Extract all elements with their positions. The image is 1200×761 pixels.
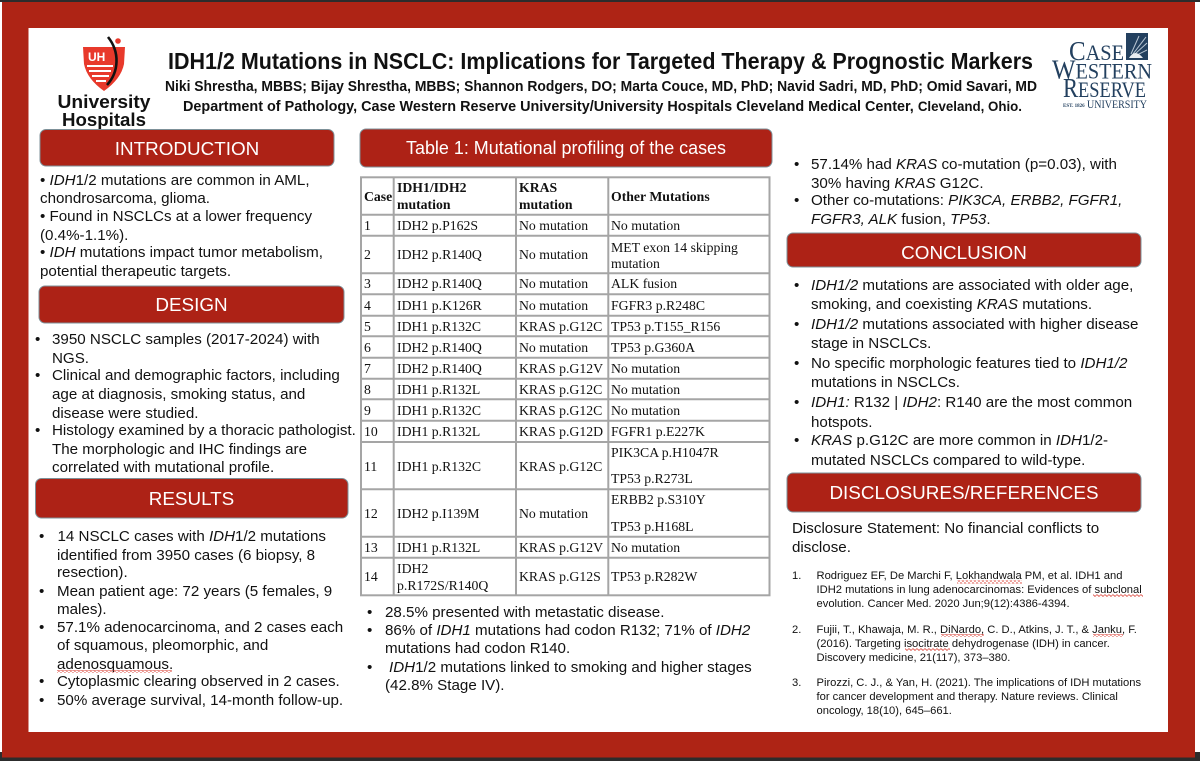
table: mutational profiling: 8 (364, 382, 371, 397)
table: mutational profiling: No mutation (611, 218, 680, 233)
text: design: • (35, 367, 40, 384)
text: results continued: • (367, 659, 372, 676)
table: mutational profiling: IDH1 p.R132C (397, 319, 481, 334)
heading: introduction (40, 130, 334, 166)
text: results: • (39, 673, 44, 690)
table: mutational profiling: mutation (397, 197, 451, 212)
table: mutational profiling: FGFR1 p.E227K (611, 424, 705, 439)
table: mutational profiling: KRAS (519, 180, 558, 195)
table: mutational profiling: ERBB2 p.S310Y (611, 492, 706, 507)
text: references: Pirozzi, C. J., & Yan, H. (2021). The implications of IDH mutations (816, 677, 1141, 689)
text: conclusion (794, 277, 1138, 469)
text: results: • (39, 528, 44, 545)
text: results: Mean patient age: 72 years (5 females, 9 (57, 583, 332, 600)
table: mutational profiling: 14 (364, 569, 378, 584)
text: results: identified from 3950 cases (6 biopsy, 8 (57, 547, 315, 564)
text: results: Cytoplasmic clearing observed in 2 cases. (57, 673, 340, 690)
text: references: evolution. Cancer Med. 2020 Jun;9(12):4386-4394. (816, 598, 1070, 610)
table: mutational profiling: IDH1 p.R132C (397, 459, 481, 474)
text: results: • (39, 619, 44, 636)
text: results: • (39, 583, 44, 600)
text: references (792, 570, 1143, 717)
table: mutational profiling: 10 (364, 424, 378, 439)
table: mutational profiling: KRAS p.G12C (519, 319, 602, 334)
text: disclosure statement (792, 520, 1099, 556)
table: mutational profiling: 4 (364, 298, 371, 313)
text: references: 2. (792, 624, 801, 636)
table: mutational profiling: p.R172S/R140Q (397, 578, 488, 593)
table: mutational profiling: ALK fusion (611, 276, 677, 291)
text: references: Rodriguez EF, De Marchi F, Lokhandwala PM, et al. IDH1 and (816, 570, 1122, 582)
logo: University Hospitals: University (58, 92, 150, 112)
logo: University Hospitals (58, 37, 150, 130)
text: references: 3. (792, 677, 801, 689)
table: mutational profiling: IDH1 p.R132L (397, 424, 480, 439)
table: mutational profiling: KRAS p.G12C (519, 403, 602, 418)
text: co-mutations (794, 156, 1122, 228)
text: introduction (40, 172, 323, 280)
table: mutational profiling: No mutation (519, 506, 588, 521)
heading: disclosures and references: DISCLOSURES/REFERENCES (829, 482, 1099, 503)
title: IDH1/2 Mutations in NSCLC: Implications for Targeted Therapy & Prognostic Markers (168, 48, 1033, 74)
text: design: Histology examined by a thoracic pathologist. (52, 422, 356, 439)
logo: Case Western Reserve University: UNIVERSITY (1087, 97, 1147, 111)
table: mutational profiling: 3 (364, 276, 371, 291)
table: mutational profiling: No mutation (611, 540, 680, 555)
table: mutational profiling: No mutation (611, 403, 680, 418)
table: mutational profiling: No mutation (519, 247, 588, 262)
table: mutational profiling: 9 (364, 403, 371, 418)
heading: results (36, 478, 348, 518)
text: co-mutations: Other co-mutations: PIK3CA, ERBB2, FGFR1, (811, 192, 1122, 209)
text: design: Clinical and demographic factors, including (52, 367, 340, 384)
heading: table 1 (360, 129, 772, 167)
text: conclusion: mutated NSCLCs compared to wild-type. (811, 452, 1085, 469)
text: results: 50% average survival, 14-month follow-up. (57, 692, 343, 709)
table: mutational profiling: IDH2 p.R140Q (397, 340, 482, 355)
text: conclusion: • (794, 394, 799, 411)
table: mutational profiling: 5 (364, 319, 371, 334)
text: results continued: mutations had codon R140. (385, 640, 570, 657)
logo: Case Western Reserve University (1052, 33, 1152, 111)
text: introduction: (0.4%-1.1%). (40, 227, 128, 244)
table: mutational profiling: IDH2 p.I139M (397, 506, 480, 521)
text: design: NGS. (52, 350, 89, 367)
text: references: (2016). Targeting isocitrate dehydrogenase (IDH) in cancer. (816, 638, 1110, 650)
text: co-mutations: 30% having KRAS G12C. (811, 175, 984, 192)
text: design: age at diagnosis, smoking status, and (52, 386, 305, 403)
text: results: adenosquamous. (57, 656, 173, 673)
text: conclusion: IDH1: R132 | IDH2: R140 are the most common (811, 394, 1132, 411)
table: mutational profiling: No mutation (611, 382, 680, 397)
affiliation: Department of Pathology, Case Western Reserve University/University Hospitals Cleveland Medical Center, Cleveland, Ohio. (183, 99, 1022, 115)
logo: Case Western Reserve University: EST. 1826 (1063, 104, 1085, 109)
table: mutational profiling: IDH1 p.K126R (397, 298, 483, 313)
table: mutational profiling: Other Mutations (611, 189, 710, 204)
text: results: males). (57, 601, 107, 618)
text: disclosure statement: Disclosure Statement: No financial conflicts to (792, 520, 1099, 537)
text: conclusion: mutations in NSCLCs. (811, 374, 960, 391)
text: conclusion: KRAS p.G12C are more common in IDH1/2- (811, 432, 1108, 449)
table: mutational profiling: 7 (364, 361, 371, 376)
table: mutational profiling: PIK3CA p.H1047R (611, 445, 720, 460)
text: results: 57.1% adenocarcinoma, and 2 cases each (57, 619, 343, 636)
text: references: Discovery medicine, 21(117), 373–380. (816, 652, 1010, 664)
logo: Case Western Reserve University: CASE (1069, 36, 1124, 66)
text: co-mutations: • (794, 156, 799, 173)
logo: University Hospitals: Hospitals (62, 110, 146, 130)
heading: disclosures and references (787, 473, 1141, 512)
text: disclosure statement: disclose. (792, 539, 851, 556)
table: mutational profiling: IDH2 p.R140Q (397, 276, 482, 291)
table: mutational profiling: No mutation (519, 218, 588, 233)
text: introduction: • IDH mutations impact tumor metabolism, (40, 244, 323, 261)
table: mutational profiling: TP53 p.G360A (611, 340, 695, 355)
text: introduction: potential therapeutic targets. (40, 263, 231, 280)
text: co-mutations: • (794, 192, 799, 209)
heading: conclusion (787, 233, 1141, 267)
table: mutational profiling: MET exon 14 skipping (611, 240, 738, 255)
text: conclusion: No specific morphologic features tied to IDH1/2 (811, 355, 1128, 372)
table: mutational profiling: IDH1 p.R132C (397, 403, 481, 418)
text: references: 1. (792, 570, 801, 582)
logo: Case Western Reserve University: RESERVE (1063, 73, 1146, 103)
table: mutational profiling: KRAS p.G12C (519, 459, 602, 474)
heading: conclusion: CONCLUSION (901, 242, 1027, 263)
table: mutational profiling: KRAS p.G12C (519, 382, 602, 397)
table: mutational profiling: IDH2 p.R140Q (397, 361, 482, 376)
table: mutational profiling: TP53 p.H168L (611, 519, 694, 534)
heading: design (39, 286, 344, 323)
table: mutational profiling: No mutation (519, 340, 588, 355)
heading: table 1: Table 1: Mutational profiling of the cases (406, 138, 726, 158)
text: conclusion: • (794, 432, 799, 449)
table: mutational profiling: 13 (364, 540, 378, 555)
text: conclusion: hotspots. (811, 414, 872, 431)
text: design: correlated with mutational profile. (52, 459, 274, 476)
text: results continued: IDH1/2 mutations linked to smoking and higher stages (389, 659, 752, 676)
authors: Niki Shrestha, MBBS; Bijay Shrestha, MBBS; Shannon Rodgers, DO; Marta Couce, MD, PhD; Navid Sadri, MD, PhD; Omid Savari, MD (165, 79, 1037, 95)
text: references: oncology, 18(10), 645–661. (816, 705, 952, 717)
table: mutational profiling: 2 (364, 247, 371, 262)
text: introduction: • Found in NSCLCs at a lower frequency (40, 208, 313, 225)
text: results continued: (42.8% Stage IV). (385, 677, 505, 694)
text: results continued: 86% of IDH1 mutations had codon R132; 71% of IDH2 (385, 622, 751, 639)
text: conclusion: IDH1/2 mutations associated with higher disease (811, 316, 1138, 333)
heading: design: DESIGN (155, 294, 228, 315)
text: co-mutations: FGFR3, ALK fusion, TP53. (811, 211, 991, 228)
text: design: • (35, 331, 40, 348)
heading: introduction: INTRODUCTION (115, 138, 259, 159)
table: mutational profiling: TP53 p.T155_R156 (611, 319, 720, 334)
table: mutational profiling: IDH1 p.R132L (397, 382, 480, 397)
text: results: of squamous, pleomorphic, and (57, 637, 268, 654)
text: conclusion: • (794, 316, 799, 333)
table: mutational profiling: KRAS p.G12S (519, 569, 601, 584)
table: mutational profiling: 1 (364, 218, 371, 233)
table: mutational profiling: IDH2 p.P162S (397, 218, 478, 233)
text: introduction: • IDH1/2 mutations are common in AML, (40, 172, 310, 189)
text: design: • (35, 422, 40, 439)
text: co-mutations: 57.14% had KRAS co-mutation (p=0.03), with (811, 156, 1117, 173)
table: mutational profiling: TP53 p.R282W (611, 569, 697, 584)
table: mutational profiling (360, 176, 771, 597)
table: mutational profiling: KRAS p.G12D (519, 424, 603, 439)
text: conclusion: smoking, and coexisting KRAS mutations. (811, 296, 1092, 313)
text: references: Fujii, T., Khawaja, M. R., DiNardo, C. D., Atkins, J. T., & Janku, F. (816, 624, 1137, 636)
table: mutational profiling: 12 (364, 506, 378, 521)
text: conclusion: IDH1/2 mutations are associated with older age, (811, 277, 1133, 294)
table: mutational profiling: 11 (364, 459, 377, 474)
table: mutational profiling: IDH1/IDH2 (397, 180, 467, 195)
table: mutational profiling: TP53 p.R273L (611, 471, 693, 486)
table: mutational profiling: 6 (364, 340, 371, 355)
logo: Case Western Reserve University: WESTERN (1052, 54, 1152, 84)
table: mutational profiling: No mutation (519, 276, 588, 291)
table: mutational profiling: mutation (519, 197, 573, 212)
heading: results: RESULTS (149, 488, 234, 509)
table: mutational profiling: FGFR3 p.R248C (611, 298, 705, 313)
text: conclusion: stage in NSCLCs. (811, 335, 931, 352)
text: results continued: • (367, 604, 372, 621)
text: conclusion: • (794, 277, 799, 294)
text: results: • (39, 692, 44, 709)
table: mutational profiling: mutation (611, 256, 660, 271)
text: results continued (367, 604, 752, 694)
text: results: resection). (57, 564, 128, 581)
table: mutational profiling: No mutation (611, 361, 680, 376)
table: mutational profiling: IDH2 (397, 561, 428, 576)
table: mutational profiling: KRAS p.G12V (519, 361, 603, 376)
table: mutational profiling: IDH1 p.R132L (397, 540, 480, 555)
table: mutational profiling: No mutation (519, 298, 588, 313)
text: results continued: • (367, 622, 372, 639)
text: results: 14 NSCLC cases with IDH1/2 mutations (58, 528, 326, 545)
text: results (39, 528, 343, 709)
table: mutational profiling: Case (364, 189, 392, 204)
text: references: IDH2 mutations in lung adenocarcinomas: Evidences of subclonal (816, 584, 1142, 596)
table: mutational profiling: KRAS p.G12V (519, 540, 603, 555)
text: references: for cancer development and therapy. Nature reviews. Clinical (816, 691, 1118, 703)
table: mutational profiling: IDH2 p.R140Q (397, 247, 482, 262)
text: design: disease were studied. (52, 405, 198, 422)
text: design (35, 331, 356, 476)
logo: University Hospitals: UH (88, 50, 105, 64)
text: results continued: 28.5% presented with metastatic disease. (385, 604, 664, 621)
text: design: The morphologic and IHC findings are (52, 441, 307, 458)
text: conclusion: • (794, 355, 799, 372)
text: introduction: chondrosarcoma, glioma. (40, 190, 210, 207)
text: design: 3950 NSCLC samples (2017-2024) with (52, 331, 320, 348)
